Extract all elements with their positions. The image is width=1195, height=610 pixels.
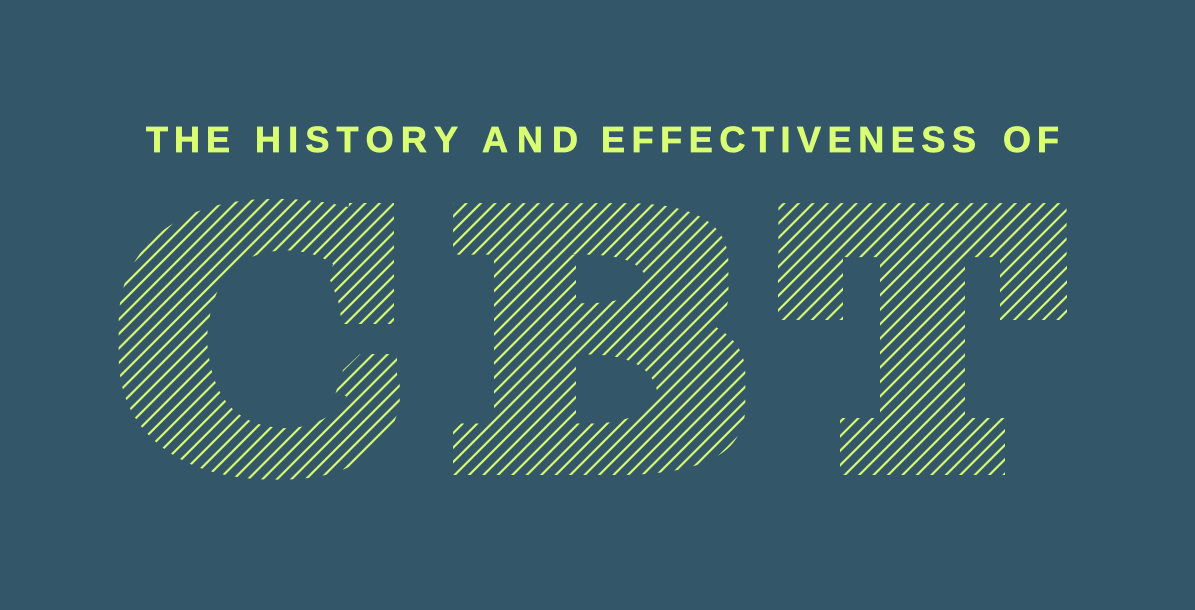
letter T: T bbox=[777, 151, 1068, 537]
title line: EFFECTIVENESS bbox=[601, 119, 976, 160]
big letters CBT bbox=[105, 151, 1068, 537]
letter C: C bbox=[105, 151, 417, 537]
diagonal stripe overlay bbox=[100, 185, 1090, 490]
letter B: B bbox=[438, 151, 764, 537]
title line bbox=[146, 119, 1059, 160]
title line: OF bbox=[1003, 119, 1059, 160]
title line: AND bbox=[482, 119, 578, 160]
title line: HISTORY bbox=[255, 119, 458, 160]
title line: THE bbox=[146, 119, 230, 160]
